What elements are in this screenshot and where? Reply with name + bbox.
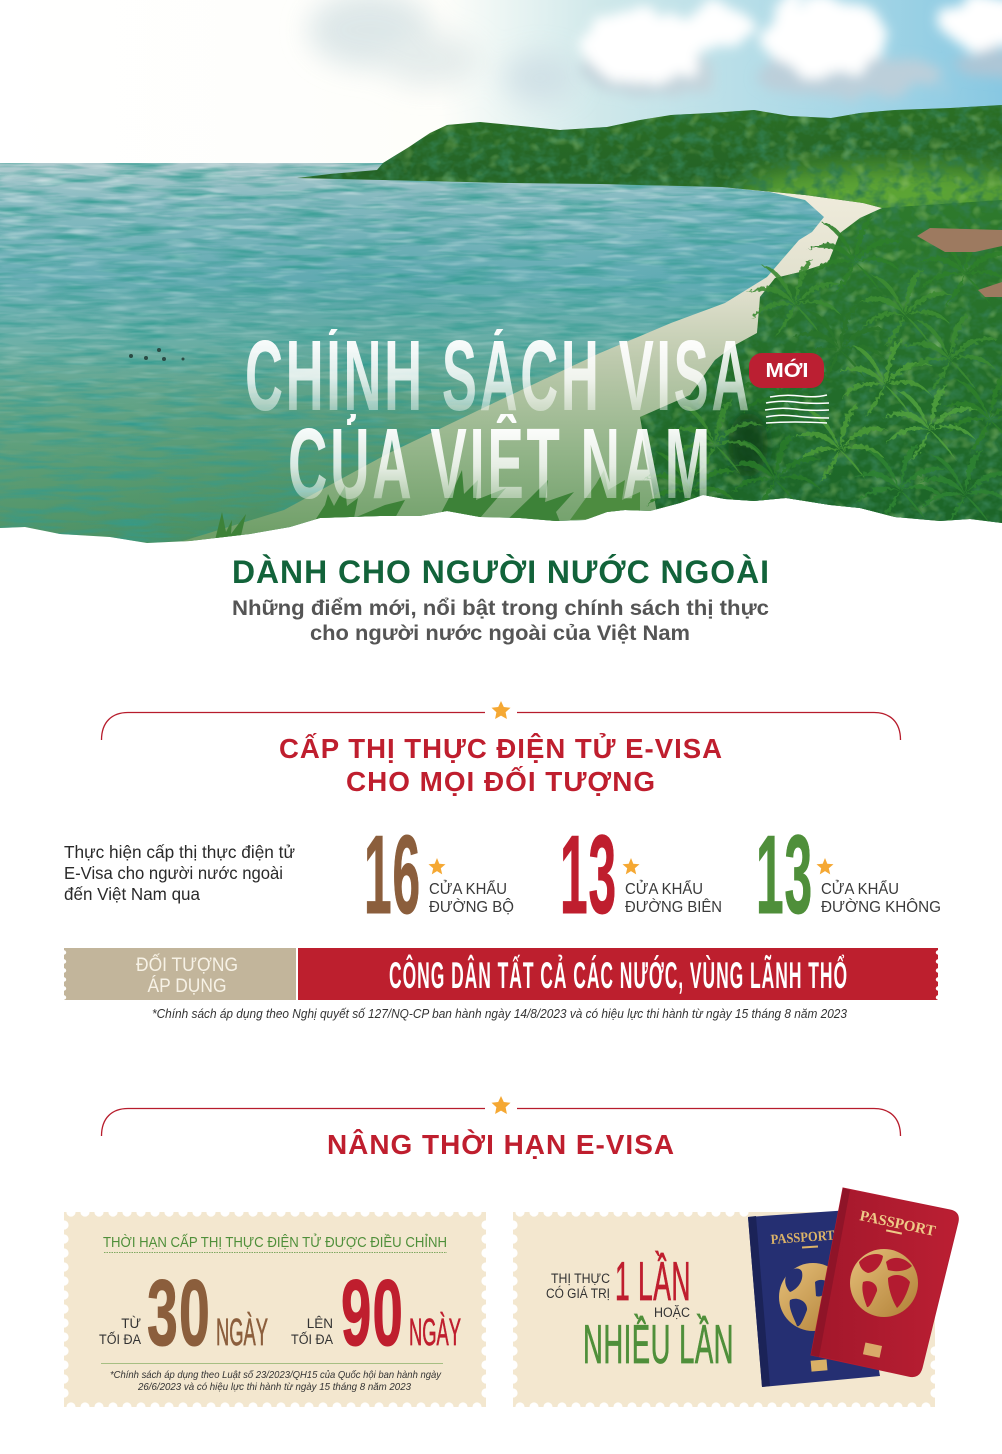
hero beach photo illustration <box>0 0 1002 563</box>
badge: MỚI: MỚI <box>766 358 808 382</box>
stamp footnote: 26/6/2023 và có hiệu lực thi hành từ ngày 15 tháng 8 năm 2023 <box>137 1381 411 1393</box>
sub-element: clouds <box>308 0 1002 102</box>
section 1 ornament <box>102 701 900 740</box>
to 90 days: LÊN <box>307 1316 333 1331</box>
stat: 13 air border gates: CỬA KHẨU <box>821 879 899 898</box>
subtitle description <box>232 597 769 645</box>
stamp footnote <box>110 1369 442 1393</box>
stat: 13 air border gates: 13 <box>756 813 813 937</box>
postmark wavy lines <box>765 395 829 423</box>
intro text: đến Việt Nam qua <box>64 884 200 904</box>
section 2 heading: NÂNG THỜI HẠN E-VISA <box>327 1129 675 1160</box>
to 90 days: 90 <box>341 1260 404 1365</box>
panel: visa validity stamp <box>508 1207 940 1412</box>
applicable audience band <box>64 948 938 1000</box>
icon: red passport <box>811 1188 958 1377</box>
intro text <box>64 842 295 904</box>
sub-element: foreground grass <box>215 470 640 540</box>
stat: 16 land border gates: ĐƯỜNG BỘ <box>429 897 514 916</box>
panel: visa validity stamp: NHIỀU LẦN <box>583 1313 734 1375</box>
stat: 13 sea border gates: CỬA KHẨU <box>625 879 703 898</box>
panel: visa validity stamp: 1 LẦN <box>615 1250 691 1312</box>
intro text: E-Visa cho người nước ngoài <box>64 863 283 883</box>
validity label: THỊ THỰC <box>551 1271 610 1286</box>
from 30 days: TỪ <box>121 1316 141 1331</box>
band label: applicable audience: ÁP DỤNG <box>148 976 226 997</box>
stat: 16 land border gates: CỬA KHẨU <box>429 879 507 898</box>
to 90 days <box>291 1260 461 1365</box>
icon: blue passport: PASSPORT <box>770 1229 836 1248</box>
subtitle description: Những điểm mới, nổi bật trong chính sách thị thực <box>232 597 769 620</box>
band value: all citizens <box>298 948 938 1000</box>
validity label: CÓ GIÁ TRỊ <box>546 1286 610 1301</box>
subtitle heading: DÀNH CHO NGƯỜI NƯỚC NGOÀI <box>232 553 770 590</box>
sub-element: forested headland <box>297 105 1002 208</box>
sub-element: swimmers <box>129 348 184 361</box>
stat: 16 land border gates: 16 <box>364 813 421 937</box>
sub-element: palm fronds <box>642 216 1002 527</box>
section 1 footnote: *Chính sách áp dụng theo Nghị quyết số 127/NQ-CP ban hành ngày 14/8/2023 và có hiệu lực thi hành từ ngày 15 tháng 8 năm 2023 <box>152 1007 847 1021</box>
band label: applicable audience: ĐỐI TƯỢNG <box>136 954 238 976</box>
stamp footnote: *Chính sách áp dụng theo Luật số 23/2023/QH15 của Quốc hội ban hành ngày <box>110 1369 442 1381</box>
stat: 13 sea border gates: 13 <box>560 813 617 937</box>
section 1 heading: CHO MỌI ĐỐI TƯỢNG <box>346 765 656 797</box>
subtitle description: cho người nước ngoài của Việt Nam <box>310 622 690 645</box>
stat: 13 air border gates <box>756 813 941 937</box>
panel: visa duration stamp: NGÀY <box>409 1311 461 1354</box>
section 1 heading <box>279 732 723 797</box>
panel: visa duration stamp: NGÀY <box>216 1311 268 1354</box>
band label: applicable audience <box>64 948 296 1000</box>
validity label <box>546 1271 610 1301</box>
or: HOẶC <box>654 1305 690 1320</box>
to 90 days: TỐI ĐA <box>291 1332 333 1347</box>
sub-element: palm jungle <box>620 195 1002 535</box>
stat: 13 sea border gates: ĐƯỜNG BIÊN <box>625 897 722 916</box>
section 1 heading: CẤP THỊ THỰC ĐIỆN TỬ E-VISA <box>279 732 723 764</box>
hero title <box>247 329 748 499</box>
sub-element: sandy beach <box>160 187 1002 560</box>
icon: red passport: PASSPORT <box>858 1208 937 1240</box>
from 30 days: TỐI ĐA <box>99 1332 141 1347</box>
section 2 ornament <box>102 1096 900 1136</box>
stamp heading: THỜI HẠN CẤP THỊ THỰC ĐIỆN TỬ ĐƯỢC ĐIỀU CHỈNH <box>103 1233 447 1251</box>
panel: visa duration stamp <box>59 1207 491 1412</box>
from 30 days: 30 <box>147 1260 211 1365</box>
intro text: Thực hiện cấp thị thực điện tử <box>64 842 295 862</box>
badge: MỚI <box>749 353 824 388</box>
icon: blue passport <box>748 1210 880 1387</box>
from 30 days <box>99 1260 268 1365</box>
sub-element: resort roofs <box>917 228 1002 297</box>
stat: 13 air border gates: ĐƯỜNG KHÔNG <box>821 897 941 916</box>
